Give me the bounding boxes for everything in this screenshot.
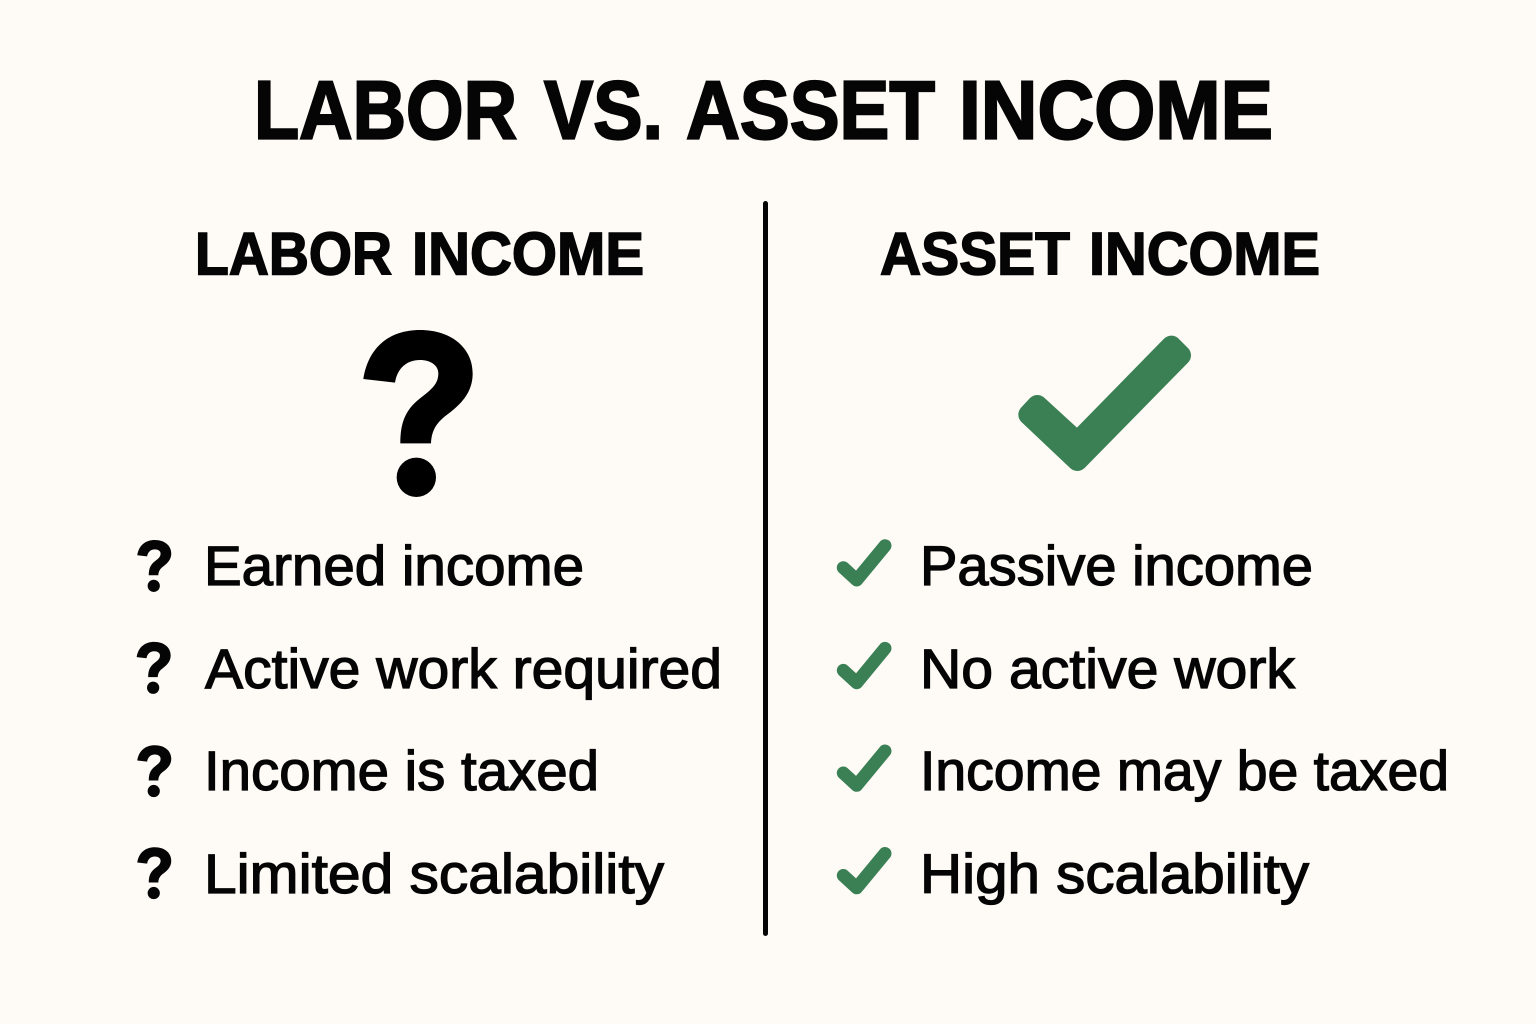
list item: high scalability: High scalability (920, 842, 1309, 905)
icon: large check mark (1029, 346, 1181, 461)
list item: earned income: Earned income (204, 534, 584, 597)
title: LABOR (254, 64, 517, 156)
center divider (763, 201, 768, 936)
title: INCOME (959, 64, 1273, 156)
list item: active work required: Active work required (205, 637, 722, 700)
panel: asset income (843, 220, 1449, 905)
list item: income is taxed: Income is taxed (204, 739, 599, 802)
list item: limited scalability: Limited scalability (204, 842, 664, 905)
title: ASSET (686, 64, 935, 156)
heading: asset income: INCOME (1089, 220, 1320, 288)
list item: no active work: No active work (920, 637, 1296, 700)
heading: asset income: ASSET (880, 220, 1070, 288)
icon: large question mark (363, 330, 473, 497)
panel: labor income (137, 220, 722, 905)
heading: labor income: INCOME (412, 220, 644, 288)
title: VS. (544, 64, 663, 156)
heading: labor income (195, 220, 644, 288)
title (254, 64, 1273, 156)
list item: passive income: Passive income (920, 534, 1313, 597)
list item: income may be taxed: Income may be taxed (920, 739, 1449, 802)
heading: labor income: LABOR (195, 220, 392, 288)
heading: asset income (880, 220, 1320, 288)
